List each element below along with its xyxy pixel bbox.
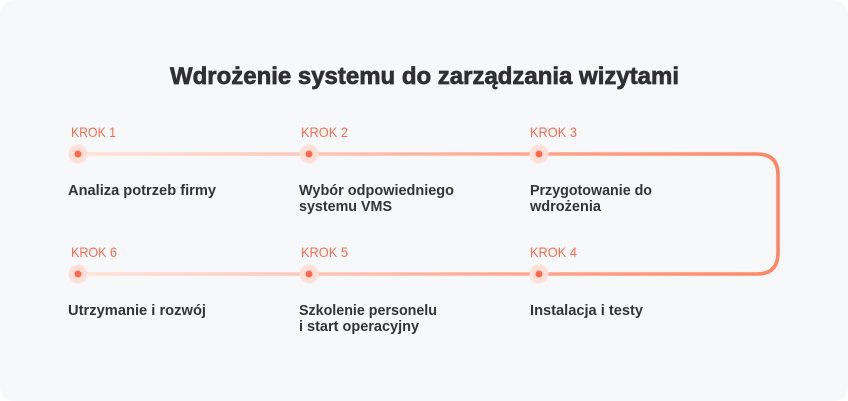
step 4 label: KROK 4 — [530, 244, 577, 260]
step 4 — [530, 244, 644, 319]
step 5 text — [299, 302, 437, 335]
step 3 text: wdrożenia — [529, 198, 602, 215]
connector line — [78, 154, 778, 274]
step 1 text: Analiza potrzeb firmy — [68, 182, 217, 199]
step 2 label: KROK 2 — [301, 124, 348, 140]
step 2 text — [299, 182, 454, 215]
step 3 marker — [530, 144, 548, 164]
title: Wdrożenie systemu do zarządzania wizytami — [170, 63, 679, 90]
step 5 text: Szkolenie personelu — [299, 302, 437, 319]
step 6 marker — [68, 264, 88, 284]
step 3 text — [529, 182, 652, 215]
step 5 text: i start operacyjny — [299, 318, 420, 335]
step 4 text: Instalacja i testy — [530, 302, 644, 319]
step 3 label: KROK 3 — [530, 124, 577, 140]
step 1 marker — [68, 144, 88, 164]
step 5 — [299, 244, 437, 335]
step 2 — [299, 124, 454, 215]
step 4 marker — [530, 264, 548, 284]
step 5 label: KROK 5 — [301, 244, 348, 260]
step 2 text: systemu VMS — [299, 198, 392, 215]
step 6 label: KROK 6 — [71, 244, 117, 260]
step 6 — [68, 244, 206, 319]
step 1 label: KROK 1 — [71, 124, 116, 140]
step 5 marker — [300, 264, 318, 284]
step 1 — [68, 124, 217, 199]
step 3 — [529, 124, 652, 215]
step 6 text: Utrzymanie i rozwój — [68, 302, 206, 319]
step 2 marker — [300, 144, 318, 164]
step 2 text: Wybór odpowiedniego — [299, 182, 454, 199]
step 3 text: Przygotowanie do — [530, 182, 652, 199]
